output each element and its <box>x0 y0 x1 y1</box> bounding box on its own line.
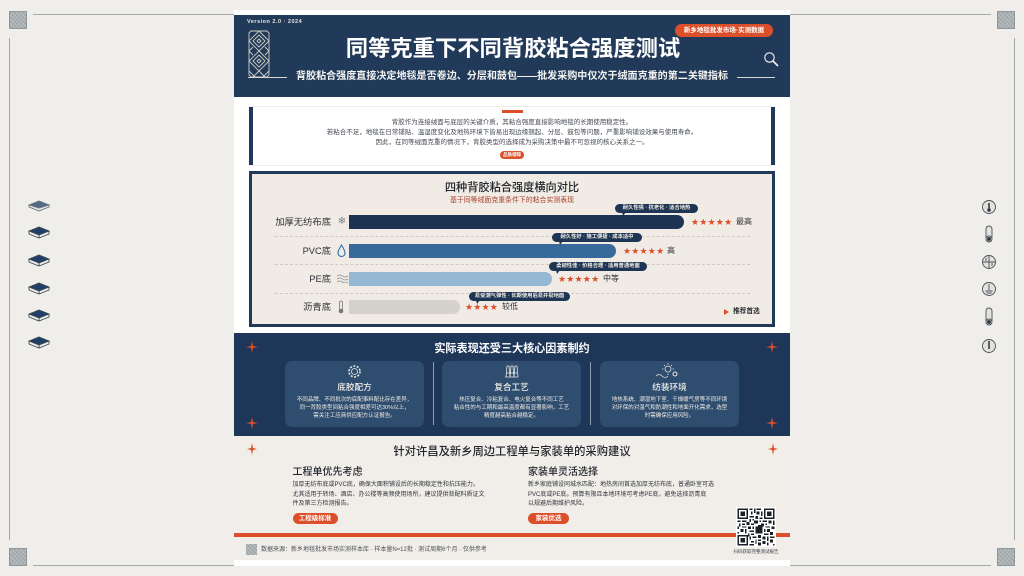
decorative frame corner: bottom right <box>997 548 1015 566</box>
card text <box>454 396 569 419</box>
accent line <box>234 533 790 537</box>
card text: 对环保的对温气和防潮性和地面开化需求，选型 <box>612 405 727 411</box>
card text: 需关注工应商供应配方认证报告。 <box>313 413 396 419</box>
QR caption: 扫码获取完整测试报告 <box>734 549 778 554</box>
intro text <box>327 118 697 146</box>
tooltip: 易受潮气弹性 · 长期使用后易开裂地面 <box>475 293 564 299</box>
source text: 数据来源：新乡地毯批发市场实测样本库 · 样本量N=12批 · 测试周期6个月 · 仅供参考 <box>261 547 487 553</box>
intro text: 若粘合不足，地毯在日常铺贴、温湿度变化及地热环境下皆易出现边缘翘起、分层、鼓包等问题，严重影响铺设效果与使用寿命。 <box>327 129 697 136</box>
card: installation environment <box>600 361 739 427</box>
card text: 精度越高粘合越稳定。 <box>484 413 539 419</box>
title: 同等克重下不同背胶粘合强度测试 <box>346 36 680 60</box>
pill: quality: 品质保障 <box>503 152 521 157</box>
subtitle with rules: 背胶粘合强度直接决定地毯是否卷边、分层和鼓包——批发采购中仅次于绒面克重的第二关键指标 <box>296 71 728 82</box>
body text: 件及第三方检测报告。 <box>292 501 353 507</box>
icon: factory <box>505 366 518 378</box>
sparkles <box>246 341 778 429</box>
card text: 同一背胶类型间粘合强度相差可达30%以上， <box>299 405 410 411</box>
rating label: 中等 <box>603 274 619 283</box>
card text: 粘合性的与工期和最高温度都有显著影响，工艺 <box>454 405 569 411</box>
bar <box>349 215 684 229</box>
chart subtitle: 基于同等绒面克重条件下的粘合实测表现 <box>450 197 574 204</box>
card text: 时需确保应用风险。 <box>645 413 694 419</box>
bar <box>349 244 616 258</box>
pill: 家装优选 <box>536 515 562 522</box>
body text <box>528 480 714 507</box>
icon: woven carpet pattern <box>248 30 270 77</box>
icon: swatch <box>246 544 257 555</box>
version label: Version 2.0 · 2024 <box>247 19 302 25</box>
pill: 工程级标准 <box>299 515 331 522</box>
tooltip <box>469 292 570 301</box>
rating: ★★★★ <box>465 302 498 312</box>
card text: 不同品牌、不同批次的底配事料配比存在差异， <box>297 397 412 403</box>
rating label: 高 <box>667 246 675 255</box>
icon: water drop <box>338 244 346 257</box>
panel: introduction <box>249 106 775 166</box>
tooltip <box>549 262 647 271</box>
intro text: 因此，在同等绒面克重的情况下，背胶类型的选择成为采购决策中最不可忽视的核心关系之一。 <box>376 139 648 146</box>
block: home orders <box>528 466 714 524</box>
right icon column: temperature and system gauges <box>982 200 996 353</box>
body text: PVC底或PE底。预算有限且本地环境可考虑PE底，避免选择沥青底 <box>528 492 706 498</box>
QR code <box>734 507 778 554</box>
legend marker <box>724 309 729 315</box>
row: asphalt <box>303 292 570 314</box>
row: PE <box>309 262 647 286</box>
chart title: 四种背胶粘合强度横向对比 <box>445 182 579 194</box>
tooltip <box>615 204 698 213</box>
pill <box>528 513 569 524</box>
legend text: 推荐首选 <box>733 308 760 315</box>
icon: snowflake: ❄ <box>338 216 346 227</box>
body text: 尤其适用于转场、酒店、办公楼等高频使用场所，建议提供背配料质证文 <box>292 492 485 498</box>
card text <box>612 396 727 419</box>
panel: purchasing advice <box>234 436 790 560</box>
decorative frame corner: bottom left <box>9 548 27 566</box>
bar <box>349 272 552 286</box>
accent dash <box>502 110 523 112</box>
left accent bar <box>249 107 252 165</box>
card title: 复合工艺 <box>494 382 529 392</box>
heading: 工程单优先考虑 <box>292 467 362 478</box>
body text <box>292 480 485 507</box>
row label: PVC底 <box>303 246 331 256</box>
row label: PE底 <box>309 274 331 284</box>
rating: ★★★★★ <box>623 246 664 256</box>
pill <box>292 513 338 524</box>
block: project orders <box>292 466 485 524</box>
card: backing formula <box>285 361 424 427</box>
legend: recommended <box>724 306 760 315</box>
header band <box>234 14 790 97</box>
rating label: 较低 <box>502 302 518 311</box>
rating label: 最高 <box>736 217 752 226</box>
badge: market data <box>675 24 773 37</box>
row: PVC <box>303 233 675 258</box>
row label: 沥青底 <box>303 302 331 312</box>
icon: waves <box>337 274 348 283</box>
intro text: 背胶作为连接绒面与底层的关键介质，其粘合强度直接影响地毯的长期使用稳定性。 <box>392 118 632 126</box>
body text: 以规避后期维护风险。 <box>528 501 588 507</box>
tooltip <box>552 233 642 242</box>
card text: 热压复合、冷粘复合、电火复合等不同工艺 <box>459 397 564 403</box>
tooltip: 耐久性强 · 抗老化 · 适合地热 <box>623 205 690 211</box>
icon: gear <box>348 365 361 378</box>
row label: 加厚无纺布底 <box>275 217 331 227</box>
left icon column: layered carpet samples <box>28 200 50 348</box>
card text <box>297 396 412 419</box>
footer source <box>246 544 487 555</box>
tooltip: 耐久性好 · 施工便捷 · 成本适中 <box>560 234 633 240</box>
body text: 新乡家庭铺设同城水匹配：地热房间首选加厚无纺布底，普通卧室可选 <box>528 482 714 488</box>
rating: ★★★★★ <box>558 274 599 284</box>
card title: 底胶配方 <box>337 382 372 392</box>
panel: bar comparison <box>249 171 775 327</box>
icon: search <box>764 52 778 67</box>
decorative frame corner: top left <box>9 11 27 29</box>
icon: sun and gear <box>656 363 678 378</box>
bar <box>349 300 460 314</box>
card text: 地热系统、潮湿地下室、干燥暖气房等不同环境 <box>612 397 727 403</box>
card: lamination process <box>442 361 581 427</box>
panel: three core factors <box>234 333 790 436</box>
section title: 实际表现还受三大核心因素制约 <box>434 343 590 355</box>
pill: quality <box>500 151 524 159</box>
rating: ★★★★★ <box>691 218 732 228</box>
card title: 纺装环境 <box>652 382 687 392</box>
row: thick non-woven <box>275 204 752 229</box>
heading: 家装单灵活选择 <box>528 467 598 478</box>
section title: 针对许昌及新乡周边工程单与家装单的采购建议 <box>393 446 631 458</box>
decorative frame corner: top right <box>997 11 1015 29</box>
right accent bar <box>771 107 774 165</box>
body text: 加厚无纺布底或PVC底，确保大面积铺设后的长期稳定性和抗压能力。 <box>292 482 479 488</box>
icon: thermometer <box>338 300 344 314</box>
sparkles <box>247 443 778 455</box>
main poster sheet <box>234 10 790 566</box>
badge: market data: 新乡地毯批发市场·实测数据 <box>684 27 764 34</box>
tooltip: 柔韧性佳 · 价格合理 · 适用普通地面 <box>556 263 640 269</box>
